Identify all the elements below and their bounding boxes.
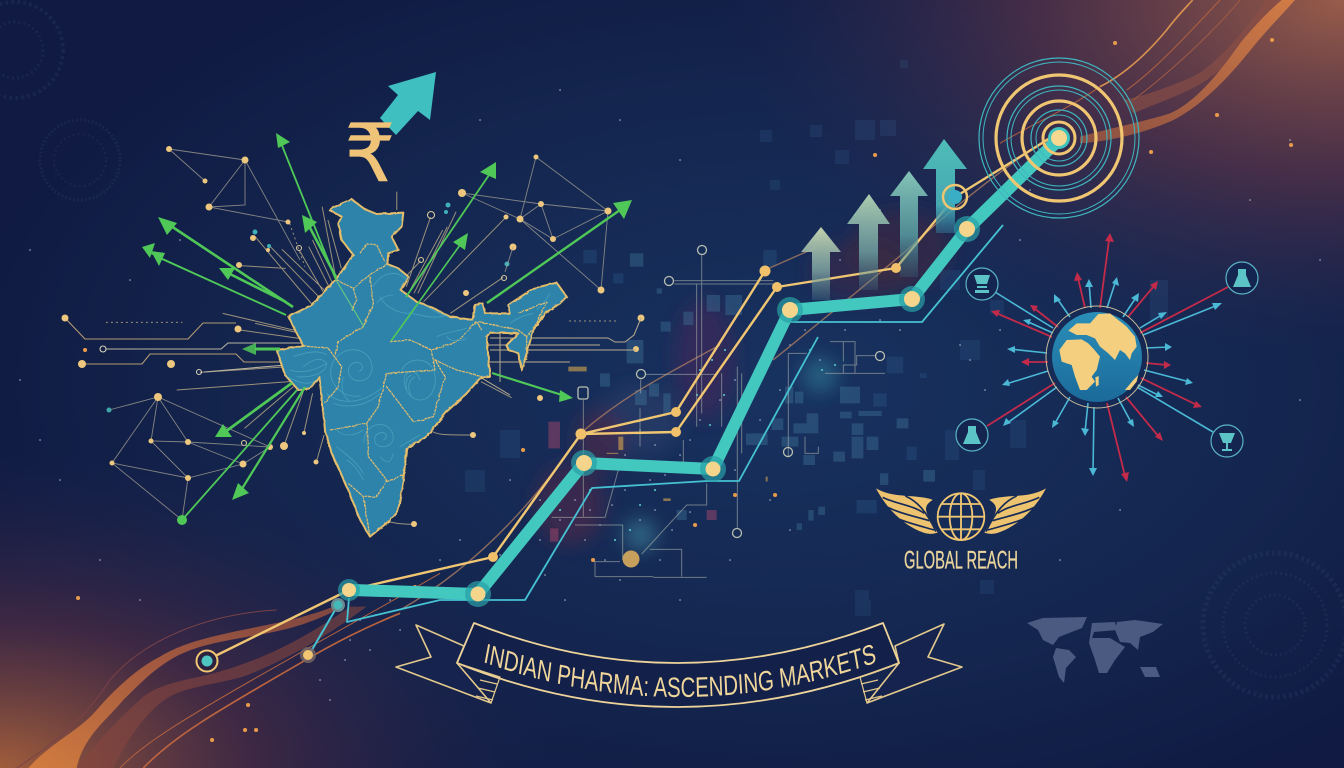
emblem: winged globe xyxy=(876,488,1046,540)
map of India xyxy=(277,199,567,537)
left circuit traces xyxy=(62,314,301,374)
globe xyxy=(1052,312,1142,402)
target rings xyxy=(979,58,1139,218)
network: upper right xyxy=(458,154,612,294)
faint world map xyxy=(1027,617,1163,683)
right wing xyxy=(984,488,1046,534)
ring node on gold line xyxy=(943,185,967,209)
network: lower left xyxy=(106,393,273,520)
thin rising arc xyxy=(400,130,1060,610)
teal radial arrows xyxy=(995,277,1222,476)
green lines over map xyxy=(336,280,364,327)
chart nodes xyxy=(338,216,980,607)
icon: flask top right xyxy=(1226,262,1258,294)
teal main line chart xyxy=(352,140,1058,594)
rupee symbol with arrow xyxy=(345,72,436,200)
icon: flask bottom left xyxy=(956,419,988,451)
radial thin lines around India xyxy=(106,192,619,524)
circuit rings xyxy=(578,246,884,538)
swoosh: bottom-left ribbons xyxy=(17,573,440,768)
icon: trophy bottom right xyxy=(1211,425,1243,457)
start node xyxy=(196,598,345,672)
icon: trophy top left xyxy=(966,268,998,300)
globe grid xyxy=(938,493,984,540)
gold growth lines xyxy=(207,132,1060,660)
rupee symbol with arrow: ₹ xyxy=(345,107,395,200)
side nodes around India xyxy=(234,202,644,527)
other data squares xyxy=(465,60,1168,616)
globe ring xyxy=(1046,306,1148,408)
network: upper left xyxy=(166,146,300,260)
label: global reach: GLOBAL REACH xyxy=(904,548,1018,574)
green arrows xyxy=(142,133,632,525)
red radial arrows xyxy=(987,233,1228,482)
swoosh: top-right ribbons xyxy=(1000,0,1295,143)
background data squares xyxy=(548,250,935,542)
state borders xyxy=(303,243,547,537)
glowing centre clusters xyxy=(535,210,950,551)
banner title text: INDIAN PHARMA: ASCENDING MARKETS xyxy=(484,644,876,698)
globe continents xyxy=(1059,313,1138,390)
big circuit node xyxy=(622,550,640,568)
globe with radiating arrows xyxy=(956,233,1258,482)
left wing xyxy=(876,488,938,534)
title banner xyxy=(395,622,963,708)
centre circuit lines xyxy=(552,255,885,577)
thin teal data line xyxy=(309,225,1003,655)
right circuit traces xyxy=(480,318,641,395)
upward arrows xyxy=(801,139,967,300)
map swirl texture xyxy=(287,273,550,480)
